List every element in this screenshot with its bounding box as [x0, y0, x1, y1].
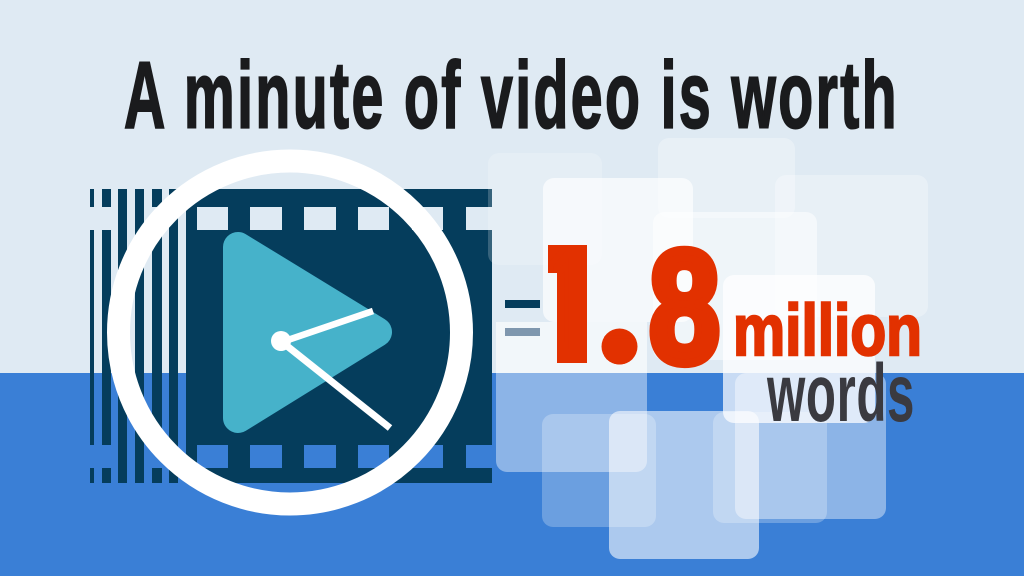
film strip: left stripes: [90, 189, 178, 483]
film strip: solid body with sprocket holes: [186, 189, 492, 483]
million label: million: [733, 291, 922, 371]
clock minute hand: [282, 311, 373, 342]
words label: words: [766, 348, 915, 439]
play triangle: [238, 247, 377, 418]
equals sign: [505, 300, 540, 336]
big number 1.8: .: [593, 194, 645, 406]
film strip icon: [90, 189, 492, 483]
clock hour hand: [282, 342, 390, 428]
big number 1.8: 8: [649, 217, 720, 396]
big number 1.8: 1: [545, 208, 597, 400]
background: pale upper band: [0, 0, 1024, 373]
clock pivot: [271, 331, 291, 351]
clock ring: [118, 161, 462, 504]
background: blue lower band: [0, 373, 1024, 576]
translucent rounded squares: [488, 138, 928, 559]
big number 1.8: [548, 245, 720, 368]
clock: [118, 161, 462, 504]
